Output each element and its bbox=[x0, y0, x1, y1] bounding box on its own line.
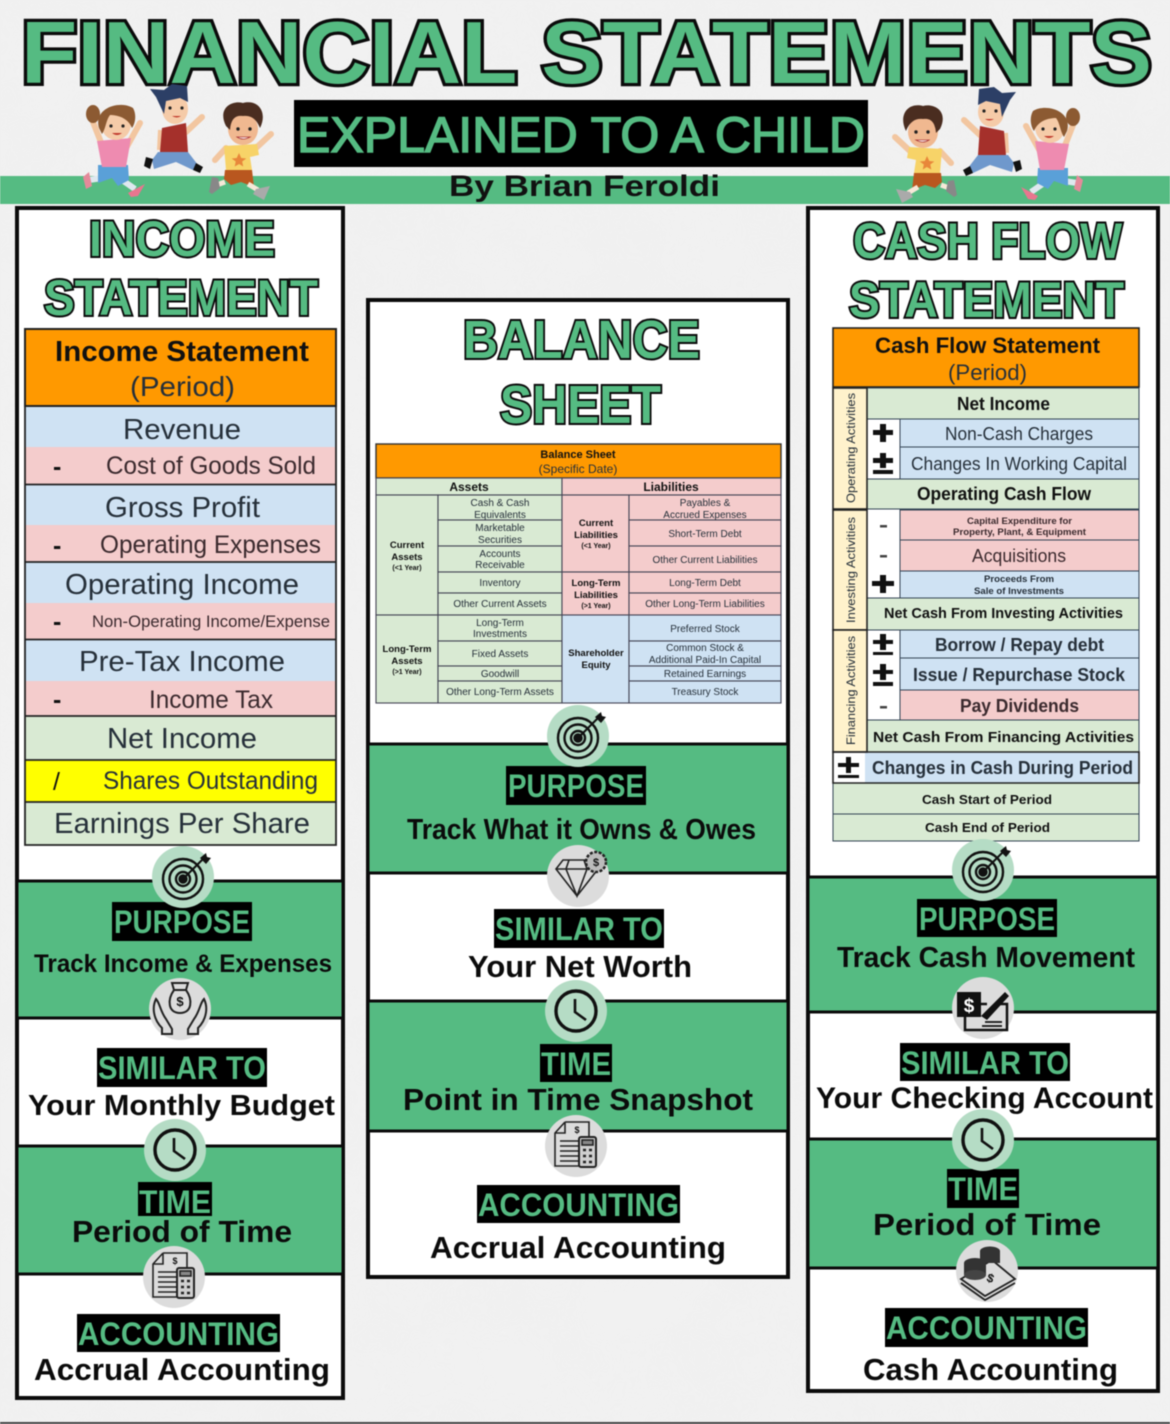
icon: check and pen: $ bbox=[964, 996, 975, 1017]
table: balance sheet: Additional Paid-In Capital bbox=[649, 655, 761, 666]
table: balance sheet: Assets bbox=[391, 656, 423, 667]
table: cash flow statement: Net Cash From Investing Activities bbox=[884, 605, 1123, 622]
table: income statement: Non-Operating Income/Expense bbox=[92, 612, 330, 631]
table: cash flow statement: Investing Activities bbox=[844, 517, 858, 623]
band: income similar to: SIMILAR TO bbox=[98, 1050, 266, 1086]
table: balance sheet bbox=[376, 444, 781, 703]
table: balance sheet: Common Stock & bbox=[666, 643, 744, 654]
band: balance time: TIME bbox=[541, 1046, 611, 1082]
table: balance sheet: (<1 Year) bbox=[581, 543, 611, 550]
band: cash flow accounting bbox=[863, 1308, 1118, 1387]
icon: diamond with coin: $ bbox=[593, 857, 599, 869]
illustration: children right bbox=[895, 87, 1083, 203]
table: balance sheet: Inventory bbox=[479, 578, 521, 589]
table: income statement: Earnings Per Share bbox=[54, 808, 310, 840]
icon: target bbox=[547, 705, 609, 767]
heading: cash flow statement: STATEMENT bbox=[849, 272, 1124, 328]
table: balance sheet: Equivalents bbox=[474, 510, 526, 521]
table: cash flow statement: Proceeds From bbox=[984, 574, 1054, 585]
table: income statement bbox=[25, 329, 336, 845]
table: income statement: Pre-Tax Income bbox=[79, 646, 285, 678]
heading: balance sheet bbox=[463, 310, 700, 435]
table: income statement: Net Income bbox=[107, 723, 257, 755]
panel: cash flow statement bbox=[808, 208, 1158, 1391]
table: cash flow statement: Financing Activities bbox=[844, 636, 858, 745]
table: cash flow statement: Cash Start of Period bbox=[922, 792, 1052, 807]
band: balance time bbox=[368, 1001, 788, 1131]
table: balance sheet: Preferred Stock bbox=[670, 624, 741, 635]
table: cash flow statement: Net Income bbox=[957, 394, 1050, 414]
table: balance sheet: Liabilities bbox=[574, 530, 618, 541]
table: income statement: Operating Expenses bbox=[100, 531, 321, 559]
table: income statement: - bbox=[53, 453, 61, 481]
heading: balance sheet: BALANCE bbox=[463, 310, 700, 370]
band: balance similar to: Your Net Worth bbox=[468, 949, 692, 984]
illustration: children left bbox=[83, 84, 271, 200]
table: balance sheet: (<1 Year) bbox=[392, 565, 422, 572]
table: balance sheet: Long-Term Debt bbox=[669, 578, 741, 589]
table: income statement: Income Statement bbox=[55, 336, 309, 368]
title: FINANCIAL STATEMENTS bbox=[21, 3, 1152, 102]
table: cash flow statement: Borrow / Repay debt bbox=[935, 635, 1104, 655]
band: income purpose: PURPOSE bbox=[114, 904, 250, 940]
heading: balance sheet: SHEET bbox=[500, 375, 661, 435]
table: income statement: - bbox=[53, 532, 61, 560]
heading: cash flow statement: CASH FLOW bbox=[853, 213, 1123, 269]
table: balance sheet: Long-Term bbox=[383, 644, 431, 655]
heading: income statement bbox=[44, 211, 318, 326]
icon: money bag in hands bbox=[149, 978, 211, 1040]
heading: income statement: INCOME bbox=[89, 211, 275, 267]
icon: calculator and document bbox=[143, 1246, 205, 1308]
table: cash flow statement: Property, Plant, & Equipment bbox=[953, 527, 1087, 538]
subtitle: EXPLAINED TO A CHILD bbox=[297, 107, 865, 163]
table: income statement: Gross Profit bbox=[105, 492, 260, 524]
band: cash flow accounting: ACCOUNTING bbox=[886, 1310, 1087, 1346]
signs bbox=[838, 424, 894, 778]
table: income statement: Revenue bbox=[123, 414, 241, 446]
table: balance sheet: (>1 Year) bbox=[581, 603, 611, 610]
band: balance purpose bbox=[368, 744, 788, 873]
band: balance accounting: Accrual Accounting bbox=[430, 1230, 726, 1265]
band: income time: TIME bbox=[139, 1184, 211, 1220]
icon: coins and banknote bbox=[956, 1240, 1018, 1302]
table: cash flow statement: Changes In Working Capital bbox=[911, 454, 1127, 474]
icon: clock bbox=[545, 980, 607, 1042]
band: cash flow similar to: SIMILAR TO bbox=[901, 1045, 1069, 1081]
band: cash flow purpose bbox=[808, 877, 1158, 1012]
table: balance sheet: (>1 Year) bbox=[392, 669, 422, 676]
heading: cash flow statement bbox=[849, 213, 1124, 328]
table: cash flow statement: Sale of Investments bbox=[974, 586, 1064, 597]
icon: diamond with coin bbox=[547, 845, 609, 907]
panel: income statement bbox=[17, 208, 343, 1398]
table: cash flow statement: Cash End of Period bbox=[925, 820, 1050, 835]
heading: income statement: STATEMENT bbox=[44, 270, 318, 326]
band: income similar to bbox=[28, 1048, 335, 1122]
table: balance sheet: Retained Earnings bbox=[664, 669, 746, 680]
band: cash flow purpose: Track Cash Movement bbox=[837, 942, 1135, 974]
table: cash flow statement: Issue / Repurchase Stock bbox=[913, 665, 1126, 685]
icon: check and pen bbox=[952, 977, 1014, 1039]
table: cash flow statement: Non-Cash Charges bbox=[945, 424, 1093, 444]
band: income purpose: Track Income & Expenses bbox=[34, 950, 332, 978]
band: balance accounting bbox=[430, 1185, 726, 1265]
table: balance sheet: Current bbox=[390, 540, 425, 551]
table: cash flow statement: Net Cash From Financing Activities bbox=[873, 729, 1134, 746]
table: balance sheet: Treasury Stock bbox=[672, 687, 739, 698]
panel: balance sheet bbox=[368, 300, 788, 1277]
table: balance sheet: Assets bbox=[391, 552, 423, 563]
band: income time: Period of Time bbox=[72, 1214, 292, 1249]
table: income statement: Income Tax bbox=[149, 686, 273, 714]
table: balance sheet: Long-Term bbox=[476, 618, 524, 629]
table: balance sheet: Fixed Assets bbox=[472, 649, 528, 660]
table: cash flow statement: (Period) bbox=[948, 360, 1027, 385]
table: balance sheet: (Specific Date) bbox=[539, 462, 617, 476]
byline: By Brian Feroldi bbox=[449, 170, 720, 203]
table: balance sheet: Accrued Expenses bbox=[663, 510, 747, 521]
icon: clock bbox=[144, 1119, 206, 1181]
band: cash flow time: Period of Time bbox=[873, 1207, 1101, 1242]
band: income purpose bbox=[17, 881, 343, 1018]
table: balance sheet: Payables & bbox=[680, 498, 731, 509]
band: cash flow similar to: Your Checking Account bbox=[816, 1082, 1153, 1115]
table: balance sheet: Other Current Liabilities bbox=[652, 555, 758, 566]
table: cash flow statement: Pay Dividends bbox=[960, 696, 1079, 716]
table: balance sheet: Liabilities bbox=[643, 480, 699, 494]
band: cash flow purpose: PURPOSE bbox=[919, 901, 1055, 937]
table: balance sheet: Long-Term bbox=[572, 578, 620, 589]
table: balance sheet: Equity bbox=[581, 660, 611, 671]
band: income accounting: Accrual Accounting bbox=[34, 1352, 330, 1387]
table: income statement: Operating Income bbox=[65, 569, 299, 601]
table: cash flow statement: Operating Activities bbox=[844, 393, 858, 503]
table: cash flow statement: Capital Expenditure for bbox=[967, 516, 1072, 527]
table: cash flow statement: Changes in Cash During Period bbox=[872, 758, 1133, 778]
band: income similar to: Your Monthly Budget bbox=[28, 1090, 335, 1122]
icon: clock bbox=[952, 1109, 1014, 1171]
table: balance sheet: Assets bbox=[449, 480, 489, 494]
table: balance sheet: Other Current Assets bbox=[453, 599, 547, 610]
table: balance sheet: Other Long-Term Assets bbox=[446, 687, 554, 698]
table: balance sheet: Shareholder bbox=[568, 648, 624, 659]
band: cash flow time bbox=[808, 1139, 1158, 1268]
table: balance sheet: Marketable bbox=[475, 523, 525, 534]
table: cash flow statement bbox=[833, 328, 1139, 841]
table: cash flow statement: Operating Cash Flow bbox=[917, 484, 1092, 504]
table: balance sheet: Liabilities bbox=[574, 590, 618, 601]
table: income statement: / bbox=[53, 768, 60, 796]
band: income time bbox=[17, 1146, 343, 1274]
icon: target bbox=[152, 846, 214, 908]
table: income statement: (Period) bbox=[130, 371, 235, 402]
table: balance sheet: Cash & Cash bbox=[471, 498, 529, 509]
table: cash flow statement: Cash Flow Statement bbox=[875, 333, 1101, 358]
table: income statement: - bbox=[53, 686, 61, 714]
table: cash flow statement: Acquisitions bbox=[972, 546, 1066, 566]
table: balance sheet: Balance Sheet bbox=[540, 449, 616, 461]
table: balance sheet: Goodwill bbox=[481, 669, 519, 680]
table: balance sheet: Other Long-Term Liabilities bbox=[645, 599, 765, 610]
band: balance similar to bbox=[468, 909, 692, 984]
band: cash flow accounting: Cash Accounting bbox=[863, 1352, 1118, 1387]
table: balance sheet: Accounts bbox=[479, 549, 521, 560]
band: balance similar to: SIMILAR TO bbox=[495, 911, 663, 947]
table: income statement: Cost of Goods Sold bbox=[106, 452, 316, 480]
band: balance accounting: ACCOUNTING bbox=[478, 1187, 679, 1223]
icon: target bbox=[952, 839, 1014, 901]
band: income accounting bbox=[34, 1314, 330, 1387]
band: income accounting: ACCOUNTING bbox=[78, 1316, 279, 1352]
band: balance time: Point in Time Snapshot bbox=[403, 1082, 753, 1117]
icon: money bag in hands: $ bbox=[176, 994, 184, 1009]
green band bbox=[0, 176, 1170, 204]
table: income statement: - bbox=[53, 608, 61, 636]
table: income statement: Shares Outstanding bbox=[103, 767, 318, 795]
table: balance sheet: Short-Term Debt bbox=[668, 529, 742, 540]
table: balance sheet: Current bbox=[579, 518, 614, 529]
table: balance sheet: Investments bbox=[473, 629, 527, 640]
table: balance sheet: Receivable bbox=[475, 560, 525, 571]
table: balance sheet: Securities bbox=[478, 535, 522, 546]
band: cash flow similar to bbox=[816, 1043, 1153, 1115]
band: balance purpose: PURPOSE bbox=[508, 768, 644, 804]
icon: calculator and document bbox=[545, 1115, 607, 1177]
icon: coins and banknote: $ bbox=[985, 1271, 996, 1286]
band: cash flow time: TIME bbox=[948, 1171, 1018, 1207]
band: balance purpose: Track What it Owns & Owes bbox=[407, 814, 756, 846]
